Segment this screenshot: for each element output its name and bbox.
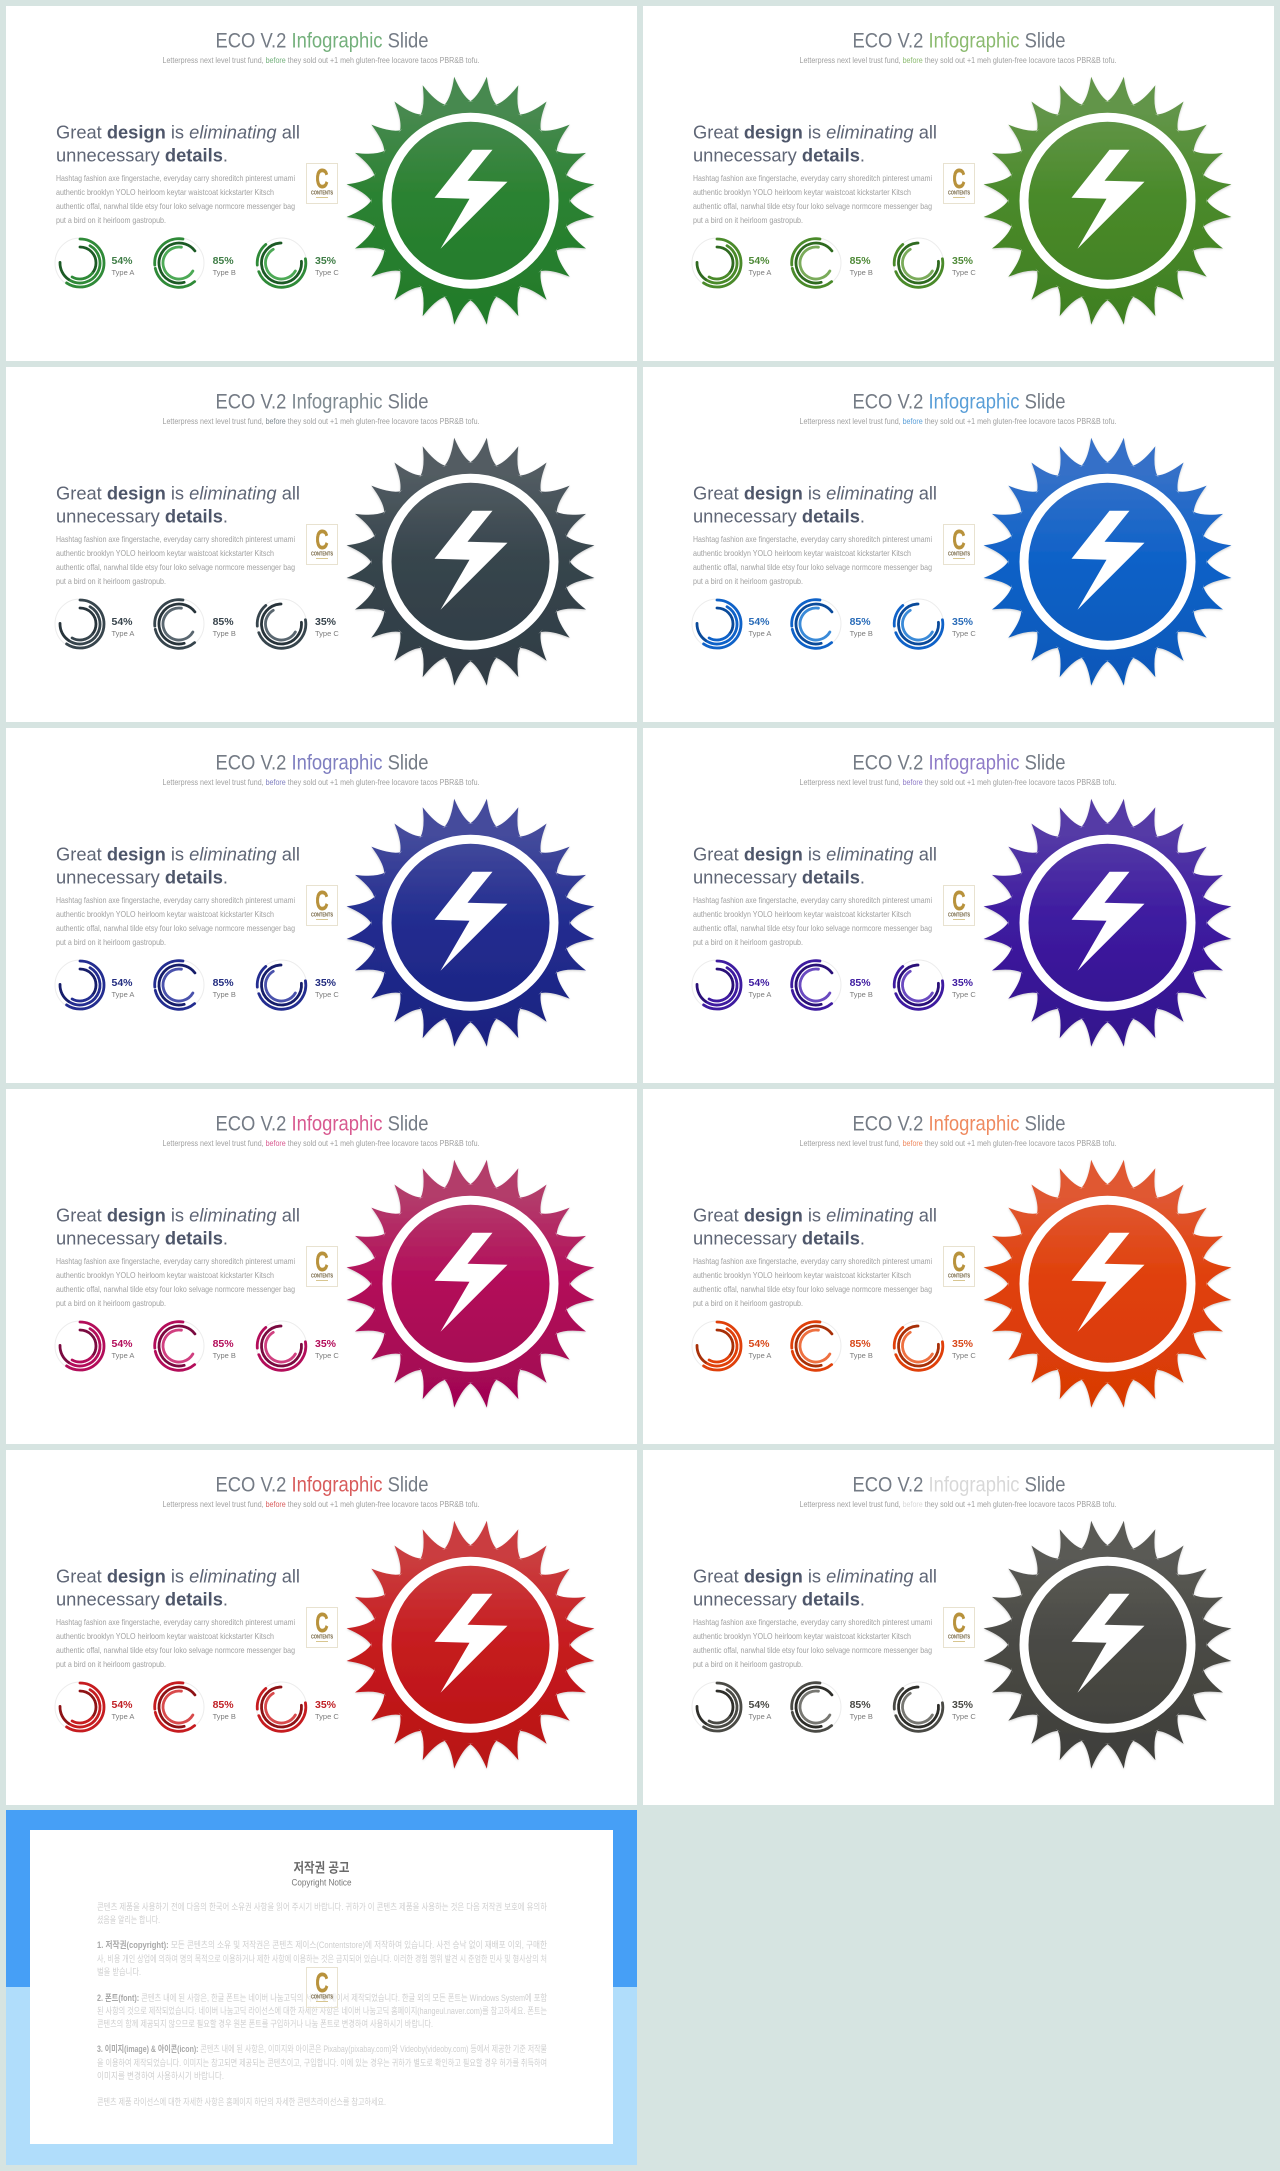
icon: logo badge: C bbox=[316, 885, 328, 916]
stat: type C bbox=[890, 596, 976, 652]
stat: type B: Type B bbox=[850, 990, 873, 999]
stat: type A: Type A bbox=[748, 1712, 771, 1721]
icon: logo badge: CONTENTS bbox=[311, 1634, 334, 1640]
stat: type A: Type A bbox=[112, 1712, 134, 1721]
stat: type C bbox=[253, 596, 339, 652]
stat: type C: Type C bbox=[315, 990, 339, 999]
body text: put a bird on it heirloom gastropub. bbox=[56, 937, 166, 947]
title: ECO V.2 Infographic Slide bbox=[216, 30, 428, 52]
stat: type B: Type B bbox=[850, 1351, 873, 1360]
stat: type C bbox=[253, 235, 339, 291]
icon: logo badge: CONTENTS bbox=[311, 912, 334, 918]
stat: type B: Type B bbox=[850, 268, 873, 277]
stat: type B bbox=[782, 590, 873, 658]
stat: type C bbox=[890, 1679, 976, 1735]
text block: copyright body: 2. 폰트(font): 콘텐츠 내에 된 사항은, 한글 폰트는 네이버 나눔고딕의 서체 및 제이서 제작되었습니다. 한글 외의 모든 폰트는 Windows System에 포함 bbox=[97, 1992, 547, 2003]
icon: sun badge with lightning bolt bbox=[982, 1158, 1234, 1410]
body text: put a bird on it heirloom gastropub. bbox=[56, 1659, 166, 1669]
stat: type B bbox=[145, 590, 236, 658]
icon: logo badge bbox=[306, 1967, 338, 2008]
icon: logo badge: CONTENTS bbox=[311, 552, 334, 558]
stat: type B: 85% bbox=[850, 1338, 871, 1350]
stat: type B: 85% bbox=[213, 977, 234, 989]
body text: authentic offal, narwhal tilde etsy four loko selvage normcore messenger bag bbox=[693, 1284, 932, 1294]
stat: type C: Type C bbox=[315, 268, 339, 277]
text block: copyright body bbox=[97, 1901, 548, 2107]
stat: type B bbox=[145, 229, 236, 297]
icon: logo badge: CONTENTS bbox=[948, 1274, 971, 1280]
panel: purple slide bbox=[643, 728, 1274, 1083]
subtitle: Letterpress next level trust fund, before they sold out +1 meh gluten-free locavore tacos PBR&B tofu. bbox=[800, 1138, 1116, 1148]
stat: type B: 85% bbox=[850, 977, 871, 989]
body text: put a bird on it heirloom gastropub. bbox=[693, 215, 803, 225]
stat: type A: Type A bbox=[748, 629, 771, 638]
icon: logo badge: C bbox=[952, 1607, 966, 1638]
stat: type A: 54% bbox=[748, 255, 770, 267]
panel: copyright notice bbox=[6, 1810, 637, 2165]
icon: logo badge: CONTENTS bbox=[948, 1634, 971, 1640]
text block: copyright body: 벌을 받습니다. bbox=[97, 1967, 141, 1977]
heading: unnecessary details. bbox=[693, 1590, 865, 1610]
icon: sun badge with lightning bolt bbox=[344, 436, 596, 688]
icon: logo badge bbox=[944, 1246, 974, 1286]
body text: authentic brooklyn YOLO heirloom keytar waistcoat kickstarter Kitsch bbox=[56, 548, 274, 558]
icon: logo badge bbox=[944, 524, 974, 564]
heading: Great design is eliminating all bbox=[693, 484, 937, 504]
body text: put a bird on it heirloom gastropub. bbox=[693, 1298, 803, 1308]
body text: authentic offal, narwhal tilde etsy four loko selvage normcore messenger bag bbox=[693, 1645, 932, 1655]
heading: unnecessary details. bbox=[56, 1590, 228, 1610]
stat: type C: Type C bbox=[952, 1712, 976, 1721]
body text bbox=[56, 534, 295, 586]
title: ECO V.2 Infographic Slide bbox=[216, 752, 428, 774]
heading bbox=[693, 122, 937, 166]
heading: Great design is eliminating all bbox=[56, 484, 300, 504]
stat: type B: 85% bbox=[850, 1699, 871, 1711]
heading: unnecessary details. bbox=[693, 506, 865, 526]
body text: authentic offal, narwhal tilde etsy four loko selvage normcore messenger bag bbox=[56, 923, 295, 933]
stat: type C: 35% bbox=[952, 616, 974, 628]
icon: logo badge: C bbox=[952, 524, 966, 555]
heading: Great design is eliminating all bbox=[693, 122, 937, 142]
stat: type B bbox=[145, 1312, 236, 1380]
body text bbox=[693, 895, 932, 947]
body text: Hashtag fashion axe fingerstache, everyday carry shoreditch pinterest umami bbox=[56, 534, 295, 544]
subtitle: Letterpress next level trust fund, before they sold out +1 meh gluten-free locavore tacos PBR&B tofu. bbox=[800, 55, 1116, 65]
stat: type B bbox=[145, 1673, 236, 1741]
heading: Great design is eliminating all bbox=[693, 1566, 937, 1586]
body text: authentic offal, narwhal tilde etsy four loko selvage normcore messenger bag bbox=[693, 923, 932, 933]
icon: sun badge with lightning bolt bbox=[344, 1519, 596, 1771]
heading: Great design is eliminating all bbox=[56, 844, 300, 864]
body text: authentic brooklyn YOLO heirloom keytar waistcoat kickstarter Kitsch bbox=[693, 1631, 911, 1641]
heading: unnecessary details. bbox=[56, 506, 228, 526]
icon: logo badge: CONTENTS bbox=[311, 1994, 334, 2000]
icon: logo badge: C bbox=[316, 524, 328, 555]
heading bbox=[693, 1566, 937, 1610]
subtitle: Letterpress next level trust fund, before they sold out +1 meh gluten-free locavore tacos PBR&B tofu. bbox=[162, 777, 480, 787]
stat: type A: 54% bbox=[748, 977, 770, 989]
icon: logo badge bbox=[944, 1607, 974, 1648]
panel: red slide bbox=[6, 1450, 637, 1805]
stat: type B bbox=[145, 951, 236, 1019]
icon: logo badge bbox=[306, 524, 338, 564]
stat: type A: 54% bbox=[748, 616, 770, 628]
stat: type C bbox=[253, 1679, 339, 1735]
icon: logo badge bbox=[944, 163, 974, 204]
panel: green slide bbox=[6, 6, 637, 361]
stat: type A: Type A bbox=[112, 1351, 134, 1360]
icon: logo badge bbox=[306, 885, 338, 926]
stat: type C: Type C bbox=[315, 1712, 339, 1721]
icon: logo badge bbox=[944, 885, 974, 926]
panel: olive slide bbox=[643, 6, 1274, 361]
icon: logo badge bbox=[306, 1607, 338, 1648]
heading: unnecessary details. bbox=[56, 1228, 228, 1248]
body text: authentic offal, narwhal tilde etsy four loko selvage normcore messenger bag bbox=[693, 201, 932, 211]
subtitle: Letterpress next level trust fund, before they sold out +1 meh gluten-free locavore tacos PBR&B tofu. bbox=[162, 416, 480, 426]
stat: type B: Type B bbox=[213, 990, 236, 999]
stat: type A: 54% bbox=[112, 616, 133, 628]
icon: logo badge: CONTENTS bbox=[311, 1274, 334, 1280]
heading: Great design is eliminating all bbox=[56, 1566, 300, 1586]
stat: type A: 54% bbox=[112, 977, 133, 989]
subtitle: Letterpress next level trust fund, before they sold out +1 meh gluten-free locavore tacos PBR&B tofu. bbox=[800, 777, 1116, 787]
stat: type B: Type B bbox=[213, 268, 236, 277]
body text: Hashtag fashion axe fingerstache, everyday carry shoreditch pinterest umami bbox=[56, 1256, 295, 1266]
icon: sun badge with lightning bolt bbox=[344, 75, 596, 327]
body text bbox=[56, 895, 295, 947]
text block: copyright body: 사, 비용 개인 상업에 의하여 명의 목적으로 이용하거나 제한 사항에 이용하는 것은 금지되어 있습니다. 이러한 경험 행위 발견 시 준엄한 민사 및 형사상의 처 bbox=[97, 1953, 547, 1964]
icon: sun badge with lightning bolt bbox=[982, 75, 1234, 327]
body text: authentic brooklyn YOLO heirloom keytar waistcoat kickstarter Kitsch bbox=[56, 909, 274, 919]
body text: put a bird on it heirloom gastropub. bbox=[693, 1659, 803, 1669]
icon: logo badge: CONTENTS bbox=[948, 552, 971, 558]
stat: type B: 85% bbox=[850, 616, 871, 628]
stat: type B: 85% bbox=[213, 255, 234, 267]
stat: type A: 54% bbox=[112, 255, 133, 267]
heading: copyright title: 저작권 공고 bbox=[294, 1860, 350, 1876]
heading bbox=[693, 844, 937, 888]
stat: type B: Type B bbox=[850, 1712, 873, 1721]
stat: type A: 54% bbox=[112, 1699, 133, 1711]
heading: unnecessary details. bbox=[693, 146, 865, 166]
stat: type B: Type B bbox=[213, 1712, 236, 1721]
body text bbox=[693, 173, 932, 225]
stat: type A bbox=[689, 957, 771, 1013]
body text: authentic brooklyn YOLO heirloom keytar waistcoat kickstarter Kitsch bbox=[56, 187, 274, 197]
stat: type A bbox=[52, 596, 134, 652]
heading bbox=[56, 122, 300, 166]
icon: sun badge with lightning bolt bbox=[982, 436, 1234, 688]
stat: type B: Type B bbox=[213, 629, 236, 638]
body text: authentic brooklyn YOLO heirloom keytar waistcoat kickstarter Kitsch bbox=[693, 909, 911, 919]
text block: copyright body: 된 사항의 것으로 제작되었습니다. 네이버 나눔고딕 라이선스에 대한 자세한 사항은 네이버 나눔고딕 홈페이지(hangeul.naver.com)를 참고하세요. 폰트는 bbox=[97, 2005, 547, 2016]
stat: type C: 35% bbox=[315, 1338, 337, 1350]
stat: type C: Type C bbox=[952, 990, 976, 999]
stat: type A bbox=[52, 235, 134, 291]
heading bbox=[56, 1206, 300, 1248]
icon: logo badge: C bbox=[316, 1607, 328, 1638]
stat: type B: 85% bbox=[213, 1338, 234, 1350]
stat: type A bbox=[52, 1679, 134, 1735]
text block: copyright body: 콘텐츠 제품 라이선스에 대한 자세한 사항은 홈페이지 하단의 자세한 콘텐츠라이선스를 참고하세요. bbox=[97, 2096, 386, 2107]
body text bbox=[693, 1617, 932, 1669]
body text: authentic brooklyn YOLO heirloom keytar waistcoat kickstarter Kitsch bbox=[693, 1270, 911, 1280]
icon: logo badge: CONTENTS bbox=[311, 190, 334, 196]
stat: type C: Type C bbox=[952, 1351, 976, 1360]
stat: type A bbox=[689, 596, 771, 652]
body text: Hashtag fashion axe fingerstache, everyday carry shoreditch pinterest umami bbox=[693, 1617, 932, 1627]
stat: type B: Type B bbox=[850, 629, 873, 638]
body text bbox=[56, 173, 295, 225]
panel: navy slide bbox=[6, 728, 637, 1083]
stat: type C bbox=[890, 1318, 976, 1374]
subtitle: Letterpress next level trust fund, before they sold out +1 meh gluten-free locavore tacos PBR&B tofu. bbox=[800, 1499, 1116, 1509]
icon: sun badge with lightning bolt bbox=[344, 797, 596, 1049]
stat: type A bbox=[52, 1318, 134, 1374]
stat: type C bbox=[253, 1318, 339, 1374]
title: ECO V.2 Infographic Slide bbox=[852, 30, 1065, 52]
text block: copyright body: 콘텐츠 제품을 사용하기 전에 다음의 한국어 소유권 사항을 읽어 주시기 바랍니다. 귀하가 이 콘텐츠 제품을 사용하는 것은 다음 저작권 보호에 유의하 bbox=[97, 1901, 548, 1912]
icon: sun badge with lightning bolt bbox=[982, 797, 1234, 1049]
body text: authentic brooklyn YOLO heirloom keytar waistcoat kickstarter Kitsch bbox=[56, 1631, 274, 1641]
stat: type A: Type A bbox=[112, 629, 134, 638]
body text: Hashtag fashion axe fingerstache, everyday carry shoreditch pinterest umami bbox=[693, 534, 932, 544]
stat: type A bbox=[689, 1679, 771, 1735]
stat: type C: 35% bbox=[315, 616, 337, 628]
stat: type B bbox=[782, 1312, 873, 1380]
stat: type C bbox=[890, 957, 976, 1013]
body text: Hashtag fashion axe fingerstache, everyday carry shoreditch pinterest umami bbox=[693, 173, 932, 183]
icon: sun badge with lightning bolt bbox=[344, 1158, 596, 1410]
stat: type B bbox=[782, 229, 873, 297]
stat: type A bbox=[689, 235, 771, 291]
text block: copyright body: 셨음을 알리는 합니다. bbox=[97, 1915, 160, 1925]
body text: put a bird on it heirloom gastropub. bbox=[693, 937, 803, 947]
body text bbox=[56, 1617, 295, 1669]
icon: logo badge: CONTENTS bbox=[948, 912, 971, 918]
heading: Great design is eliminating all bbox=[56, 122, 300, 142]
body text: Hashtag fashion axe fingerstache, everyday carry shoreditch pinterest umami bbox=[56, 1617, 295, 1627]
heading: Great design is eliminating all bbox=[693, 1206, 937, 1226]
stat: type A: Type A bbox=[748, 1351, 771, 1360]
stat: type A: Type A bbox=[748, 990, 771, 999]
body text bbox=[693, 534, 932, 586]
text block: copyright body: 이미지를 변경하여 사용하시기 바랍니다. bbox=[97, 2070, 224, 2081]
stat: type A: 54% bbox=[748, 1699, 770, 1711]
heading: Great design is eliminating all bbox=[693, 844, 937, 864]
subtitle: Letterpress next level trust fund, before they sold out +1 meh gluten-free locavore tacos PBR&B tofu. bbox=[162, 1138, 480, 1148]
subtitle: Letterpress next level trust fund, before they sold out +1 meh gluten-free locavore tacos PBR&B tofu. bbox=[162, 55, 480, 65]
stat: type C bbox=[890, 235, 976, 291]
body text: put a bird on it heirloom gastropub. bbox=[56, 215, 166, 225]
stat: type C: Type C bbox=[952, 629, 976, 638]
stat: type C: 35% bbox=[315, 977, 337, 989]
body text: authentic brooklyn YOLO heirloom keytar waistcoat kickstarter Kitsch bbox=[56, 1270, 274, 1280]
body text: Hashtag fashion axe fingerstache, everyday carry shoreditch pinterest umami bbox=[693, 895, 932, 905]
body text: authentic offal, narwhal tilde etsy four loko selvage normcore messenger bag bbox=[693, 562, 932, 572]
title: ECO V.2 Infographic Slide bbox=[852, 1112, 1065, 1136]
subtitle: Letterpress next level trust fund, before they sold out +1 meh gluten-free locavore tacos PBR&B tofu. bbox=[162, 1499, 480, 1509]
body text: Hashtag fashion axe fingerstache, everyday carry shoreditch pinterest umami bbox=[56, 173, 295, 183]
body text: authentic offal, narwhal tilde etsy four loko selvage normcore messenger bag bbox=[56, 201, 295, 211]
stat: type A: Type A bbox=[748, 268, 771, 277]
icon: logo badge: C bbox=[316, 1967, 328, 1998]
body text: authentic brooklyn YOLO heirloom keytar waistcoat kickstarter Kitsch bbox=[693, 187, 911, 197]
stat: type C: 35% bbox=[952, 1699, 974, 1711]
title: ECO V.2 Infographic Slide bbox=[852, 390, 1065, 414]
body text: put a bird on it heirloom gastropub. bbox=[693, 576, 803, 586]
stat: type C: 35% bbox=[952, 977, 974, 989]
icon: logo badge: C bbox=[316, 163, 328, 194]
icon: logo badge: C bbox=[952, 163, 966, 194]
stat: type B: 85% bbox=[213, 616, 234, 628]
stat: type C: Type C bbox=[315, 1351, 339, 1360]
body text: authentic offal, narwhal tilde etsy four loko selvage normcore messenger bag bbox=[56, 1645, 295, 1655]
icon: logo badge: CONTENTS bbox=[948, 190, 971, 196]
body text: authentic brooklyn YOLO heirloom keytar waistcoat kickstarter Kitsch bbox=[693, 548, 911, 558]
stat: type A bbox=[689, 1318, 771, 1374]
panel: slate slide bbox=[6, 367, 637, 722]
heading bbox=[56, 484, 300, 526]
heading bbox=[56, 844, 300, 888]
body text: authentic offal, narwhal tilde etsy four loko selvage normcore messenger bag bbox=[56, 562, 295, 572]
heading bbox=[693, 484, 937, 526]
text block: copyright body: 3. 이미지(image) & 아이콘(icon): 콘텐츠 내에 된 사항은, 이미지와 아이콘은 Pixabay(pixabay.com)와 Videoby(videoby.com) 등에서 제공한 기준 저작물 bbox=[97, 2043, 547, 2054]
icon: logo badge: C bbox=[316, 1246, 328, 1277]
body text bbox=[56, 1256, 295, 1308]
body text: Hashtag fashion axe fingerstache, everyday carry shoreditch pinterest umami bbox=[693, 1256, 932, 1266]
title: ECO V.2 Infographic Slide bbox=[852, 752, 1065, 774]
title: ECO V.2 Infographic Slide bbox=[852, 1474, 1065, 1496]
icon: logo badge: C bbox=[952, 885, 966, 916]
stat: type A: Type A bbox=[112, 268, 134, 277]
panel: crimson slide bbox=[6, 1089, 637, 1444]
heading bbox=[56, 1566, 300, 1610]
stat: type C: Type C bbox=[315, 629, 339, 638]
icon: logo badge: C bbox=[952, 1246, 966, 1277]
heading: Great design is eliminating all bbox=[56, 1206, 300, 1226]
stat: type B: 85% bbox=[850, 255, 871, 267]
stat: type A: 54% bbox=[112, 1338, 133, 1350]
body text: authentic offal, narwhal tilde etsy four loko selvage normcore messenger bag bbox=[56, 1284, 295, 1294]
icon: logo badge bbox=[306, 163, 338, 204]
stat: type A: 54% bbox=[748, 1338, 770, 1350]
panel: charcoal slide bbox=[643, 1450, 1274, 1805]
body text: put a bird on it heirloom gastropub. bbox=[56, 1298, 166, 1308]
text block: copyright body: 콘텐츠의 함께 제공되지 않으므로 필요할 경우 원본 폰트를 구입하거나 나눔 폰트로 변경하여 사용하시기 바랍니다. bbox=[97, 2018, 433, 2029]
title: ECO V.2 Infographic Slide bbox=[216, 1112, 428, 1136]
body text bbox=[693, 1256, 932, 1308]
stat: type C: 35% bbox=[952, 255, 974, 267]
body text: Hashtag fashion axe fingerstache, everyday carry shoreditch pinterest umami bbox=[56, 895, 295, 905]
title: ECO V.2 Infographic Slide bbox=[216, 1474, 428, 1496]
heading: unnecessary details. bbox=[56, 146, 228, 166]
subheading: copyright notice: Copyright Notice bbox=[292, 1878, 352, 1888]
body text: put a bird on it heirloom gastropub. bbox=[56, 576, 166, 586]
stat: type C: Type C bbox=[952, 268, 976, 277]
stat: type A bbox=[52, 957, 134, 1013]
text block: copyright body: 을 이용하여 제작되었습니다. 이미지는 참고되면 제공되는 콘텐츠이고, 구입합니다. 이에 있는 경우는 귀하가 별도로 확인하고 필요할 경우 허가를 취득하여 bbox=[97, 2057, 547, 2068]
panel: blue slide bbox=[643, 367, 1274, 722]
stat: type C: 35% bbox=[315, 255, 337, 267]
stat: type B: Type B bbox=[213, 1351, 236, 1360]
stat: type B: 85% bbox=[213, 1699, 234, 1711]
stat: type C: 35% bbox=[952, 1338, 974, 1350]
stat: type C: 35% bbox=[315, 1699, 337, 1711]
heading: unnecessary details. bbox=[693, 1228, 865, 1248]
stat: type C bbox=[253, 957, 339, 1013]
stat: type A: Type A bbox=[112, 990, 134, 999]
heading: unnecessary details. bbox=[693, 868, 865, 888]
subtitle: Letterpress next level trust fund, before they sold out +1 meh gluten-free locavore tacos PBR&B tofu. bbox=[800, 416, 1116, 426]
icon: logo badge bbox=[306, 1246, 338, 1286]
heading: unnecessary details. bbox=[56, 868, 228, 888]
panel: orange slide bbox=[643, 1089, 1274, 1444]
heading bbox=[693, 1206, 937, 1248]
text block: copyright body: 1. 저작권(copyright): 모든 콘텐츠의 소유 및 저작권은 콘텐츠 제이스(Contentstore)에 저작하여 있습니다. 사전 승낙 없이 재배포 이외, 구매한 bbox=[97, 1939, 547, 1950]
stat: type B bbox=[782, 951, 873, 1019]
stat: type B bbox=[782, 1673, 873, 1741]
title: ECO V.2 Infographic Slide bbox=[216, 390, 428, 414]
icon: sun badge with lightning bolt bbox=[982, 1519, 1234, 1771]
